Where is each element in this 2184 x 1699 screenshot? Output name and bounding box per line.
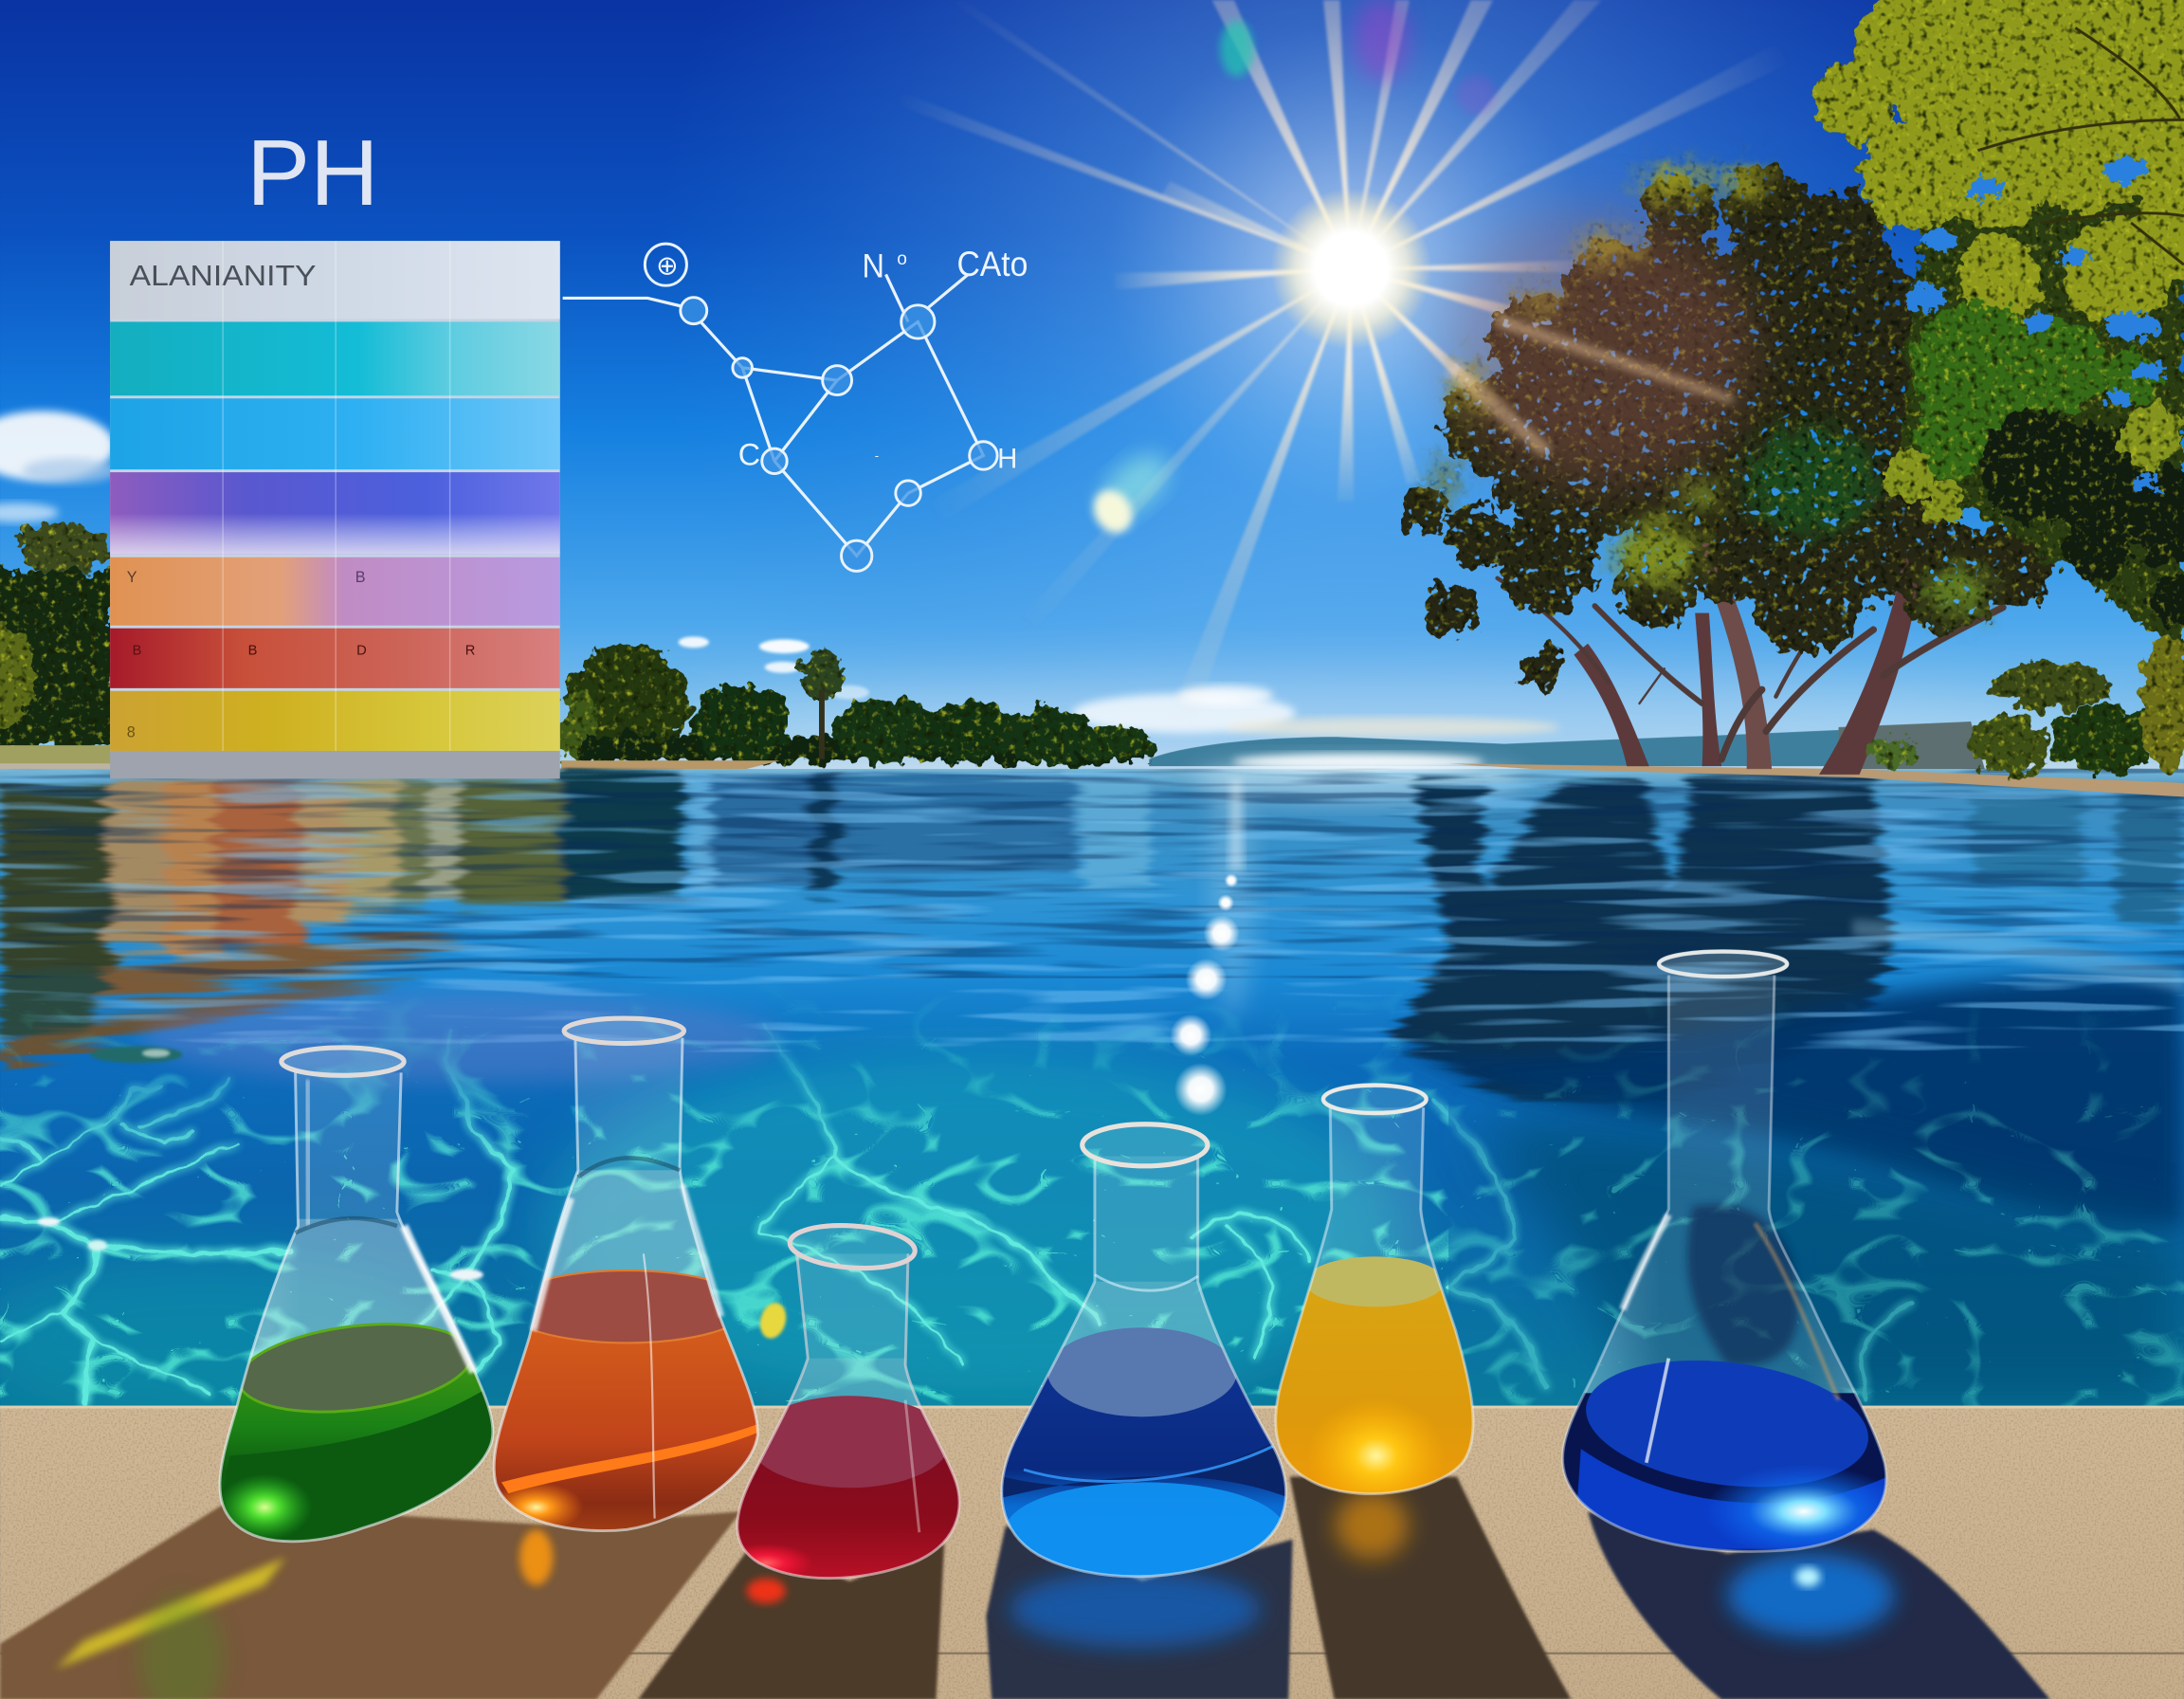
molecule: atoms bbox=[645, 244, 997, 571]
water bbox=[0, 754, 2184, 1421]
chart: red row bbox=[110, 629, 560, 688]
far shore on the right bbox=[1448, 763, 2184, 796]
molecule: labels bbox=[656, 245, 1028, 475]
water: deep shadow on the right bbox=[1392, 974, 2184, 1228]
small trees at the far right bbox=[1866, 634, 2184, 776]
liquid: yellow bbox=[1261, 1256, 1490, 1514]
water: chart and shore reflection bbox=[0, 775, 1149, 1068]
chart: red row: R bbox=[465, 644, 475, 659]
canopy: shaded backing foliage bbox=[1902, 167, 2184, 655]
liquid: red bbox=[719, 1359, 975, 1588]
water: caustics bbox=[0, 976, 2184, 1410]
flask: orange bbox=[493, 1016, 759, 1532]
chart: orange row bbox=[110, 557, 560, 626]
chart: backing and base bbox=[110, 241, 560, 778]
lens flares bbox=[1086, 0, 1496, 539]
liquid: green bbox=[220, 1219, 493, 1542]
crown: dark mass bbox=[1398, 167, 2054, 689]
molecule: bonds bbox=[563, 274, 983, 556]
water: ripple texture bbox=[0, 769, 2184, 1051]
crown: warm sun haze bbox=[1448, 209, 1755, 487]
flask: blue bbox=[989, 1124, 1302, 1588]
flask: green bbox=[209, 1048, 501, 1561]
liquid: blue bbox=[989, 1282, 1302, 1588]
chart: red row: D bbox=[356, 644, 367, 659]
center tree line bbox=[558, 645, 1154, 775]
chart: red row: B bbox=[248, 644, 258, 659]
sun with rays bbox=[729, 0, 1830, 781]
molecule: labels: C bbox=[738, 438, 760, 472]
water: sun glare on the horizon bbox=[1191, 754, 1525, 1017]
flask: red bbox=[719, 1221, 975, 1588]
canopy: sky gaps bbox=[1905, 157, 2166, 492]
chart: header row: ALANIANITY bbox=[130, 259, 317, 292]
trunks of the big trees bbox=[1498, 523, 2003, 775]
sun rays crossing the tree bbox=[1446, 314, 1734, 457]
molecule: labels: - bbox=[875, 448, 879, 463]
shadow colour glows bbox=[56, 1492, 1894, 1699]
sky background bbox=[0, 0, 2184, 787]
upper right tree canopy bbox=[1813, 0, 2184, 655]
molecule: labels: o bbox=[897, 249, 907, 269]
chart: teal row bbox=[110, 321, 560, 395]
liquid: orange bbox=[494, 1170, 758, 1530]
chart: yellow row bbox=[110, 691, 560, 751]
chart: header row bbox=[110, 241, 560, 319]
crown: sunlit fringe and green patches bbox=[1434, 167, 1991, 617]
sun sparkles on water bbox=[1170, 780, 1244, 1116]
caustic bright veins bbox=[0, 1024, 1915, 1403]
canopy: dark foliage bbox=[1982, 411, 2184, 624]
water: drain bbox=[91, 1046, 183, 1063]
water: lower left teal bbox=[0, 1253, 446, 1421]
molecule: labels: N bbox=[863, 247, 884, 284]
canopy: branches bbox=[1977, 27, 2184, 265]
liquid: large blue bbox=[1546, 1345, 1904, 1567]
chart: red row: B bbox=[133, 644, 142, 659]
chart: purple row bbox=[110, 472, 560, 555]
left shore trees bbox=[0, 522, 115, 792]
chart: orange row: Y bbox=[127, 569, 137, 586]
flask: yellow bbox=[1261, 1086, 1490, 1514]
canopy: yellow sunlit foliage bbox=[1813, 0, 2184, 324]
molecule diagram bbox=[563, 244, 1028, 571]
water: centre light bbox=[543, 1045, 1407, 1407]
clouds bbox=[0, 411, 1560, 737]
water: tree reflection on the right bbox=[1392, 780, 2184, 1101]
water: pale swell bbox=[139, 920, 2184, 1083]
central tree crown bbox=[1398, 167, 2054, 689]
distant hills bbox=[1149, 722, 1985, 769]
chart: orange row: B bbox=[355, 569, 366, 586]
pool deck bbox=[0, 1406, 2184, 1699]
molecule: labels: H bbox=[997, 444, 1017, 475]
chart: yellow row: 8 bbox=[127, 723, 136, 740]
neck of the large flask shows a darker reflection bbox=[1687, 1205, 1799, 1366]
water: yellow glint bbox=[756, 1300, 790, 1342]
PH heading: PH bbox=[246, 120, 379, 225]
molecule: labels: ⊕ bbox=[656, 250, 678, 280]
chart: blue row bbox=[110, 398, 560, 469]
canopy: green mid foliage bbox=[1911, 302, 2159, 482]
flask shadows bbox=[0, 1476, 2050, 1699]
canopy: bright lower leaves bbox=[1884, 404, 2182, 521]
molecule: labels: CAto bbox=[956, 245, 1028, 283]
colour test chart bbox=[110, 241, 560, 778]
flask: large blue bbox=[1546, 952, 1904, 1567]
